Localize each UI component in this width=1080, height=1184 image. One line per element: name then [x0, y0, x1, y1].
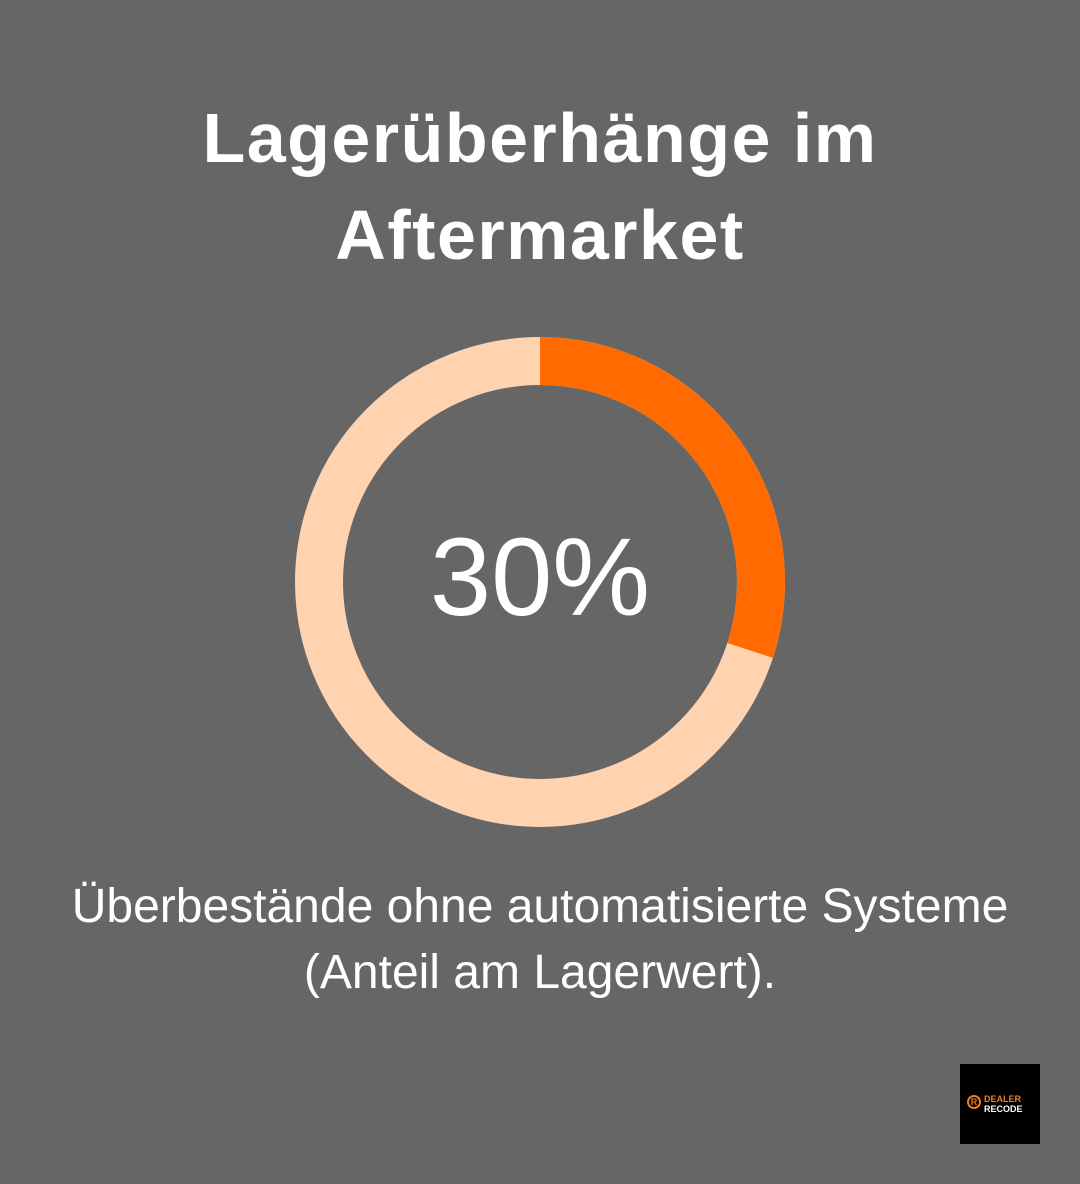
caption	[72, 880, 1008, 999]
caption: Überbestände ohne automatisierte Systeme	[72, 880, 1008, 933]
logo	[960, 1064, 1040, 1144]
title: Lagerüberhänge im	[202, 99, 878, 177]
caption: (Anteil am Lagerwert).	[304, 946, 776, 999]
logo: R	[971, 1097, 977, 1107]
logo: DEALER	[984, 1094, 1021, 1104]
logo: RECODE	[984, 1104, 1023, 1114]
title	[202, 99, 878, 274]
title: Aftermarket	[335, 196, 745, 274]
donut chart: 30%	[430, 516, 650, 639]
